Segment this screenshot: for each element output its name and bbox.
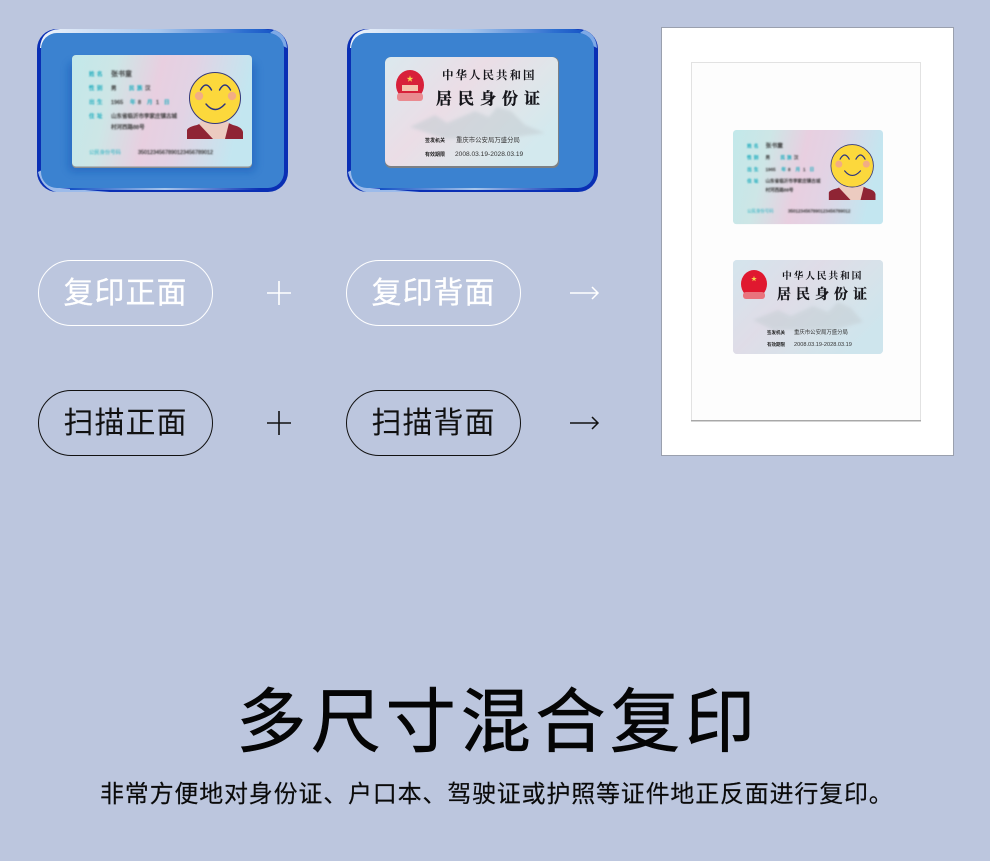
icon: smiley face (190, 72, 240, 124)
printed card: front (733, 130, 883, 224)
blurred fields: 民族 (129, 84, 145, 92)
printed card: front: 住址 (747, 177, 760, 183)
blurred fields: 1 (156, 100, 159, 106)
id card: back (385, 57, 559, 168)
id card: back: 签发机关 (425, 137, 445, 144)
id card: back: 居民身份证 (436, 90, 546, 108)
blurred fields: 3501234567890123456789012 (138, 150, 213, 156)
great wall watermark (410, 107, 545, 139)
panel: copy back card (347, 29, 598, 192)
button: scan back: 扫描背面 (372, 407, 496, 440)
printed card: front: 民族 (780, 154, 794, 161)
id card: front (72, 55, 252, 168)
printed card: front: 张书童 (765, 141, 783, 149)
printed card: front: 出生 (747, 166, 760, 173)
blurred fields: 山东省临沂市李家庄镇古城 (111, 112, 178, 120)
button: scan back (346, 390, 520, 456)
printed card: front: 姓名 (747, 142, 760, 149)
printed card: front: 8 (788, 167, 791, 172)
printed card: front: 男 (765, 155, 770, 161)
emblem: ★ (406, 75, 414, 83)
printed card: back: 2008.03.19-2028.03.19 (794, 342, 852, 348)
arrow: black (570, 417, 598, 429)
button: scan front: 扫描正面 (64, 407, 188, 440)
blurred fields: 村河西路88号 (111, 123, 145, 131)
id card: back: 重庆市公安局万盛分局 (456, 135, 520, 144)
printed card: back (733, 260, 883, 354)
icon: plus white (267, 281, 291, 305)
arrow: white (570, 287, 598, 299)
printed card: back: 中华人民共和国 (782, 269, 863, 282)
button: scan front (38, 390, 212, 456)
blurred fields: 8 (138, 100, 141, 106)
blurred fields: 住址 (89, 112, 105, 120)
blurred fields: 汉 (145, 84, 151, 92)
printed card: front: 汉 (794, 154, 799, 161)
printed card: front: 月 (795, 167, 802, 173)
icon: plus black (267, 411, 291, 435)
blurred fields: 出生 (89, 98, 105, 106)
frame: blue tray (37, 29, 288, 192)
blurred fields: 男 (111, 85, 117, 92)
button: copy back: 复印背面 (372, 277, 496, 310)
printed card: back: 居民身份证 (777, 286, 872, 303)
portrait (187, 117, 243, 139)
printed card: front: 1 (803, 167, 806, 172)
blurred fields: 年 (130, 98, 138, 106)
frame: blue tray (347, 29, 598, 192)
printed card: front: 山东省临沂市李家庄镇古城 (765, 177, 821, 184)
printed card: front: 年 (781, 166, 788, 173)
blurred fields: 月 (147, 99, 155, 106)
panel: output page (662, 28, 954, 456)
printed card: front: 村河西路88号 (765, 187, 794, 194)
printed card: back: ★ (751, 276, 757, 283)
card text: 中华人民共和国 (442, 68, 536, 82)
button: copy front (38, 260, 212, 326)
sheet (691, 62, 921, 422)
blurred fields (89, 69, 213, 156)
blurred fields: 日 (164, 99, 172, 106)
blurred fields: 张书童 (111, 69, 132, 78)
printed card: front: 1965 (765, 167, 776, 172)
printed card: front: 3501234567890123456789012 (788, 208, 851, 213)
blurred fields: 公民身份号码 (89, 148, 121, 156)
printed card: front: 公民身份号码 (747, 207, 774, 214)
printed card: front: 性别 (747, 154, 760, 161)
blurred fields: 1965 (111, 100, 123, 106)
button: copy back (346, 260, 520, 326)
id card: back: 有效期限 (425, 151, 445, 158)
printed card: back: 重庆市公安局万盛分局 (794, 328, 848, 336)
button: copy front: 复印正面 (64, 277, 188, 310)
subtitle: 非常方便地对身份证、户口本、驾驶证或护照等证件地正反面进行复印。 (100, 781, 894, 808)
printed card: back: 有效期限 (767, 341, 785, 348)
printed card: back: 签发机关 (767, 329, 785, 336)
blurred fields: 姓名 (89, 70, 105, 78)
emblem (396, 70, 424, 101)
blurred fields: 性别 (89, 84, 105, 92)
id card: back: 2008.03.19-2028.03.19 (455, 151, 524, 158)
title: 多尺寸混合复印 (236, 683, 760, 761)
printed card: front: 日 (810, 167, 816, 173)
panel: copy front card (37, 29, 288, 192)
